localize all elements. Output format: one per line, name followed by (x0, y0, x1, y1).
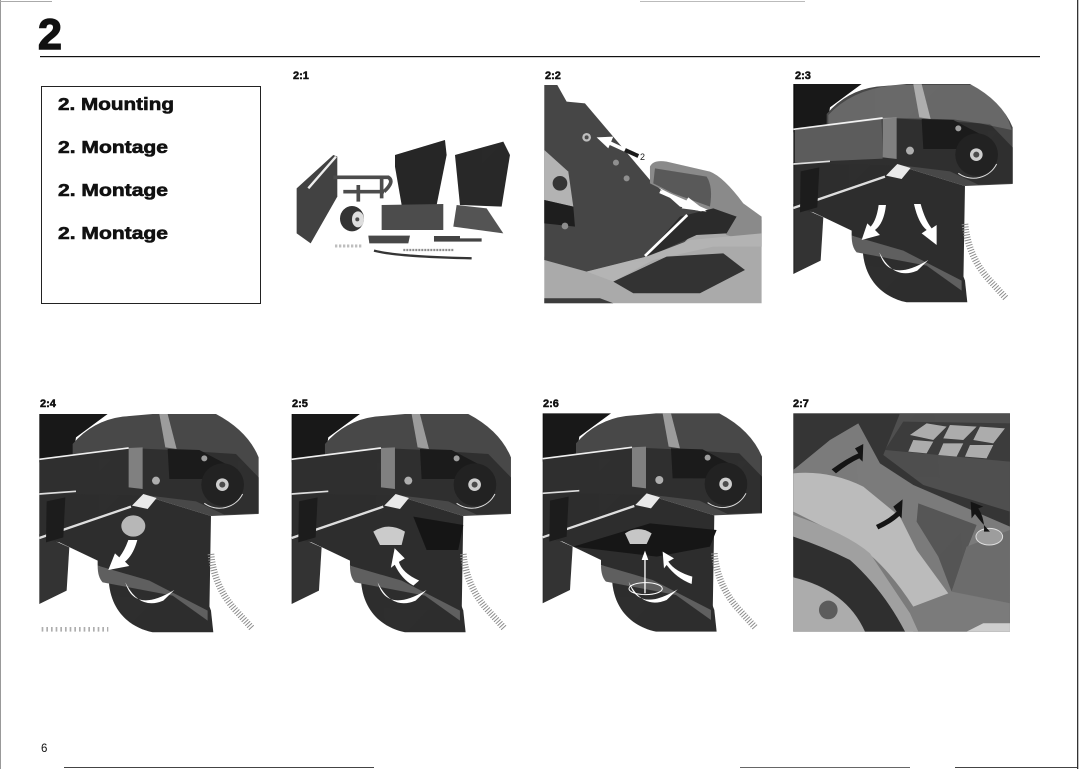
figure 2:7 fender (793, 413, 1010, 632)
arrow: white curved (663, 552, 692, 584)
arrow: white to bolt, callout 2 (597, 137, 645, 162)
figure label 2:4: 2:4 (40, 398, 57, 410)
figure 2:4 suspension (39, 414, 259, 633)
figure 2:1 parts kit (293, 137, 513, 263)
arrow: white curved up (392, 549, 418, 585)
figure label 2:2: 2:2 (545, 70, 561, 82)
figure label 2:6: 2:6 (543, 398, 559, 410)
figure 2:2 seat plate (544, 85, 762, 303)
header rule (40, 56, 1040, 57)
arrow: black curved top (832, 444, 863, 473)
arrow: white right curve (914, 204, 937, 245)
figure label 2:3: 2:3 (795, 70, 811, 82)
arrow: white to bolt, callout 2: 2 (640, 152, 645, 162)
heading: Swedish: 2. Montage (58, 137, 168, 157)
figure label 2:7: 2:7 (793, 398, 809, 410)
figure 2:5 suspension (292, 414, 511, 633)
heading: English: 2. Mounting (58, 94, 174, 114)
figure 2:3 suspension (793, 84, 1013, 302)
arrow: black curved middle (876, 499, 903, 529)
figure label 2:5: 2:5 (292, 398, 308, 410)
heading: French: 2. Montage (58, 223, 168, 243)
chapter number: 2 (38, 11, 62, 59)
arrow: white to seat bracket (660, 192, 707, 212)
panel: title box (42, 86, 260, 304)
arrow: thin vertical screw arrow with rotation ring (629, 551, 662, 595)
arrow: white left curve (862, 205, 886, 240)
heading: German: 2. Montage (58, 180, 168, 200)
arrow: white curved down (108, 540, 137, 570)
figure label 2:1: 2:1 (293, 70, 309, 82)
arrow: black curved right (971, 502, 990, 532)
white support rod (645, 215, 687, 256)
page number: 6 (41, 743, 47, 755)
figure 2:6 suspension (543, 413, 762, 632)
